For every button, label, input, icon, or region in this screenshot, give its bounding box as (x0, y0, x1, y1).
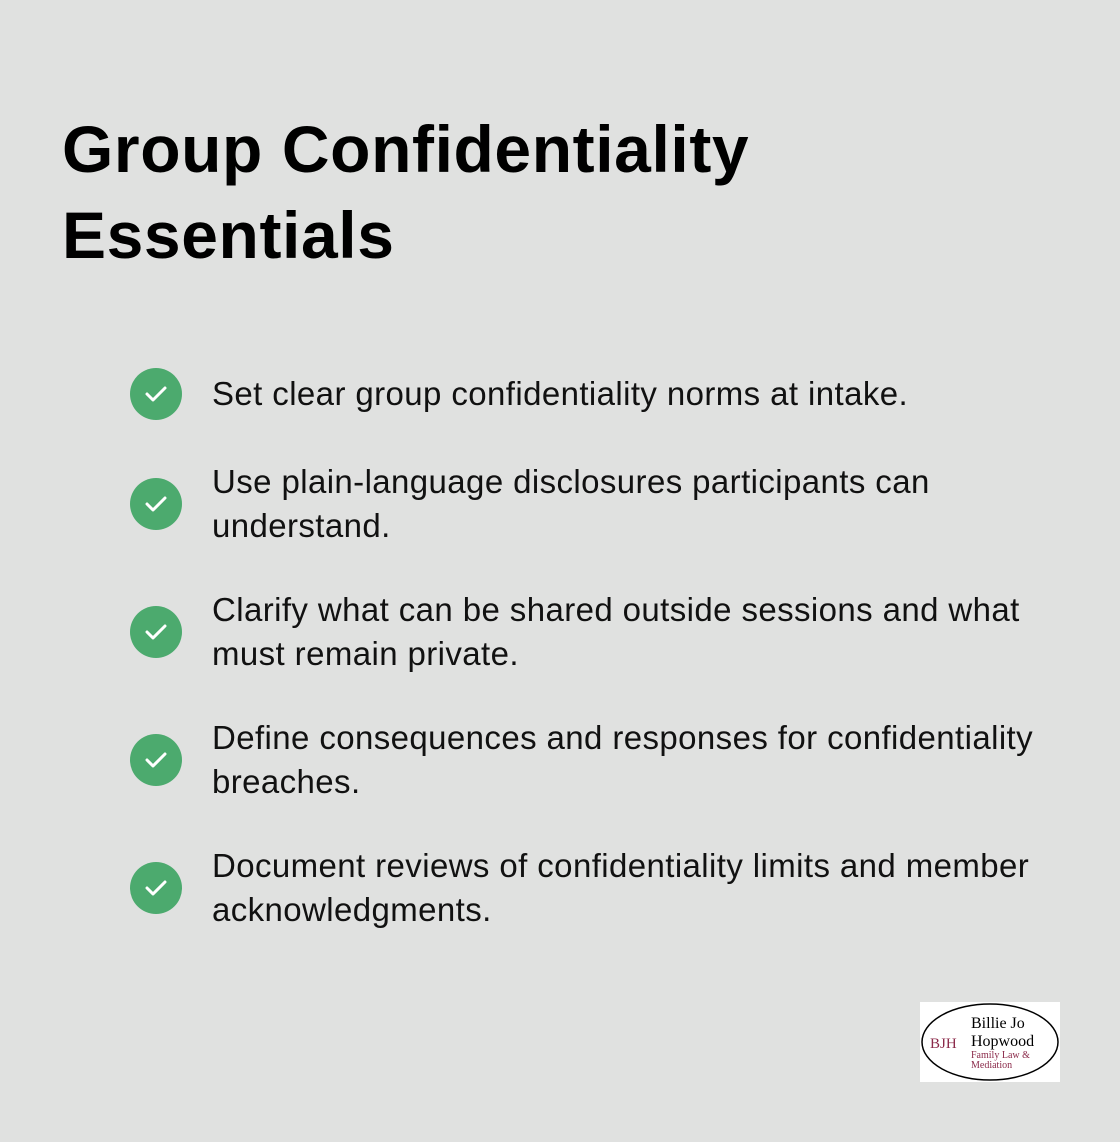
icon: check (130, 368, 182, 420)
icon: check (130, 862, 182, 914)
item 2 (130, 463, 930, 544)
logo: BJH (930, 1036, 957, 1052)
title: Group Confidentiality (62, 112, 749, 186)
logo: Mediation (971, 1060, 1012, 1071)
logo: Family Law & (971, 1050, 1030, 1061)
text: Document reviews of confidentiality limits and member (212, 847, 1029, 884)
icon: check (130, 478, 182, 530)
item 3 (130, 591, 1020, 672)
text: breaches. (212, 763, 361, 800)
item 5 (130, 847, 1029, 928)
text (212, 591, 1020, 672)
icon: check (130, 734, 182, 786)
text: Define consequences and responses for confidentiality (212, 719, 1033, 756)
title: Essentials (62, 198, 395, 272)
logo (920, 1002, 1060, 1082)
text (212, 719, 1033, 800)
title (62, 112, 749, 272)
item 1 (130, 368, 908, 420)
logo: Billie Jo (971, 1015, 1025, 1032)
text (212, 847, 1029, 928)
text (212, 463, 930, 544)
text: Set clear group confidentiality norms at intake. (212, 375, 908, 412)
item 4 (130, 719, 1033, 800)
text: Use plain-language disclosures participants can (212, 463, 930, 500)
text: Clarify what can be shared outside sessions and what (212, 591, 1020, 628)
logo: Hopwood (971, 1033, 1034, 1050)
text: must remain private. (212, 635, 519, 672)
text: acknowledgments. (212, 891, 492, 928)
icon: check (130, 606, 182, 658)
text: understand. (212, 507, 391, 544)
